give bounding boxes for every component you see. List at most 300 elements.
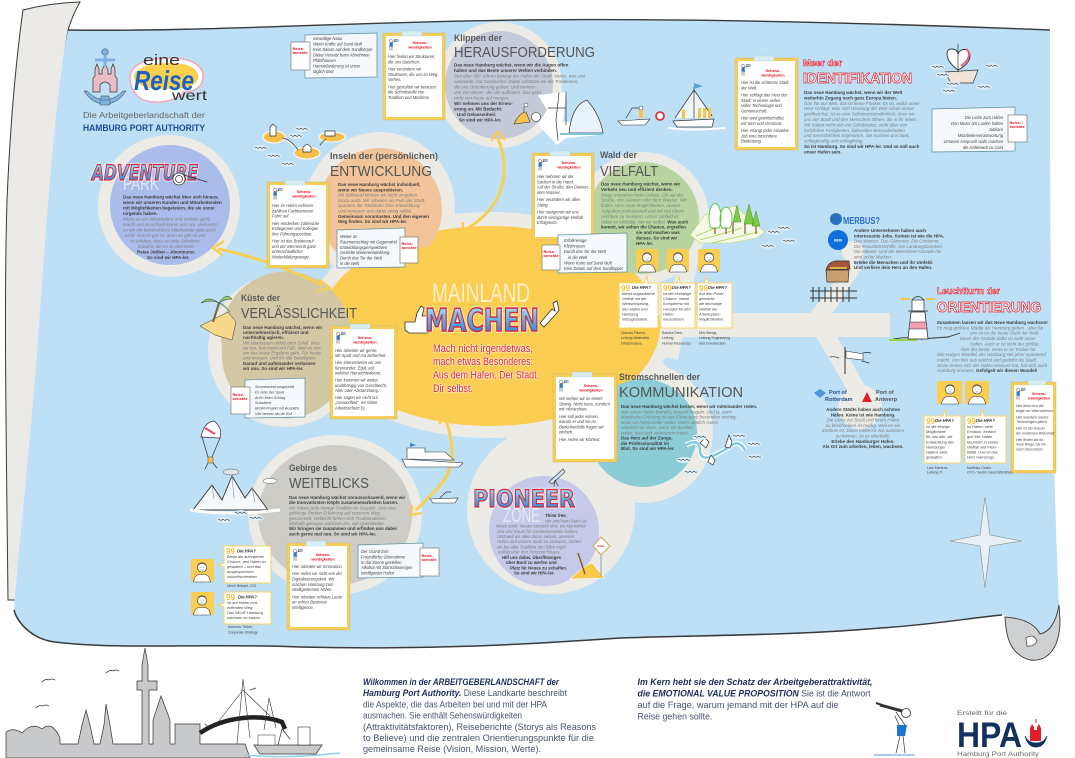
portraits: orientierung — [937, 381, 989, 404]
illustration: mountains — [190, 469, 280, 523]
text: entsteht nur dann, wenn wir darüber — [621, 425, 694, 430]
clipboard: identifikation: Job eine besondere — [740, 133, 778, 138]
text: merbus: interessante Jobs. Keinen ist wie die HPA. — [854, 233, 944, 238]
quote: matthias grabe: Herz Hamburgs. — [967, 455, 995, 460]
travel report: vielfalt: Kein Datum auf dem Sandkipper — [564, 266, 624, 271]
clipboard: orientierung: Hier ist der Kreisel — [1016, 427, 1045, 431]
clipboard: weitblicks: Hier reden wir nicht von der — [292, 571, 343, 576]
text: Zeit und Raum für Gedankenspiele haben. — [496, 529, 578, 534]
quote: lars mertens: für uns alle, die — [926, 434, 953, 439]
icon: lighthouse — [889, 296, 960, 340]
quote: claudia fischer: Hamburg — [622, 311, 639, 316]
slogan: Mach nicht irgendetwas, — [433, 343, 533, 355]
slogan: Aus dem Hafen. Der Stadt. — [433, 370, 539, 382]
quote: sandra dreh: Kompetenz mit — [663, 301, 690, 306]
text: andere staedte: zu können, ist es ebenfalls. — [835, 434, 890, 438]
quote: claudia fischer — [619, 276, 658, 345]
clipboard: verlaesslichkeit: unabhängig von Geschlecht, — [335, 383, 387, 388]
text: adventure: nicht. Das ist gut so, denn es gibt so viel — [125, 233, 206, 238]
text: adventure: macht uns so schnell keiner was vor. Und wenn — [123, 222, 218, 227]
text: core: auf die Frage, warum jemand mit der HPA auf die — [638, 700, 838, 711]
travel report: verlaesslichkeit: Auf'n fixen Schlag — [254, 396, 286, 400]
clipboard: verlaesslichkeit: Sehens- — [358, 336, 372, 340]
travel report: vielfalt — [542, 233, 627, 273]
panel: adventure park — [91, 161, 222, 260]
cream paths network — [98, 22, 890, 595]
quote: claudia fischer: Wertschöpfung, — [622, 301, 649, 306]
quote: dirk bereja — [697, 276, 732, 345]
icon: blue badge: MEIN — [834, 238, 843, 242]
clipboard: weitblicks: Hier arbeiten schlaue Leute — [292, 594, 343, 599]
illustration: tug boat — [430, 492, 458, 503]
quote: lars mertens: Entwicklung des — [926, 439, 954, 444]
quote: sandra dreh: einzusetzen. — [663, 316, 685, 322]
heading: Gebirge des — [289, 463, 337, 474]
travel report: herausforderung: Hamaufarderung ist unser — [313, 64, 361, 68]
travel report: verlaesslichkeit: Sonnenwind umgeprüft — [255, 385, 295, 389]
travel report: herausforderung: Reise- — [292, 46, 305, 51]
travel report: weitblicks: Alkohol mit Startschwierigen — [360, 565, 413, 570]
clipboard: herausforderung: stehen. — [388, 77, 401, 82]
quote: lars mertens: Ist die einzige — [926, 424, 951, 429]
text: welcome: gemeinsame Reise (Vision, Mission, Werte). — [363, 744, 541, 755]
quote: sandra dreh: Sandra Dreh, — [662, 331, 683, 335]
text: andere staedte: Erlebnis ist. Diese Liebe im Job ausleben — [822, 428, 905, 433]
clipboard: vielfalt: Hier verändern wir alles — [537, 197, 580, 202]
clipboard: vielfalt: würdigkeiten — [556, 166, 581, 170]
text: welcome — [363, 677, 596, 755]
panel: identifikation — [803, 58, 920, 154]
clipboard: verlaesslichkeit: „Gesundheit“, wir leben — [334, 400, 378, 405]
text: merbus: Die Kreuzfahrtschiffe. Die Landungsbrücken. — [854, 244, 943, 249]
text: adventure: zu erleben, dass es viele Schultern — [129, 238, 200, 244]
clipboard: vielfalt: dem Wasser. — [537, 190, 561, 195]
text: adventure: wenn wir unseren Kunden und Mitarbeitenden — [122, 200, 222, 205]
text: auch gerne mal neu. So sind wir HPA-ler. — [289, 531, 376, 536]
text: Gemeinsam vorantasten. Und den eigenen — [338, 214, 429, 219]
text: gesammelt. Vielleicht fühlen sich Traditionalisten — [289, 516, 386, 521]
text: wir bei aller Tradition den Blick regel- — [497, 544, 568, 549]
clipboard: weitblicks: Intelligence. — [292, 605, 314, 610]
text: die Professionalität im — [621, 441, 669, 446]
heading: WEITBLICKS — [289, 476, 369, 492]
text: Wozu auch. Neues entsteht dort, wo Menschen — [496, 524, 587, 529]
icon: blue badge — [828, 230, 848, 250]
text: Wir haben jede Menge Tradition im Gepäck. Und eine — [289, 505, 396, 510]
text: über Bord zu werfen und — [506, 560, 557, 565]
travel report: herausforderung: Gewaltige Natur — [313, 36, 343, 41]
clipboard: verlaesslichkeit: Alter oder Abstammung. — [334, 388, 379, 393]
quote: ulrich braeutel: 99 — [226, 547, 235, 556]
travel report: vielfalt: berichte — [544, 253, 559, 258]
clipboard: entwicklung: Kolleginnen und Kollegen — [272, 226, 319, 231]
text: Wer einen Hafen betreibt, braucht Regeln. Und ja, auch — [621, 409, 732, 414]
heading: Leuchtturm der — [937, 286, 1000, 297]
clipboard: herausforderung: Hier gestalten wir bewusst — [388, 84, 437, 89]
travel report: weitblicks — [358, 543, 439, 578]
text: Think free. — [545, 513, 567, 518]
clipboard: orientierung: lange vor Wind ablesen. — [1016, 409, 1054, 413]
text: Weg finden. So sind wir HPA-ler. — [338, 219, 407, 224]
quote: claudia fischer: Leitung Waterside — [621, 336, 649, 340]
travel report: entwicklung: Gezielte Weiterentwicklung — [340, 250, 390, 255]
text: merbus: Die Möwen. Und die Menschen! Gerade die — [854, 249, 942, 254]
icon: sand and sign: Start — [598, 544, 604, 548]
clipboard: entwicklung: Fahrt auf. — [272, 214, 290, 219]
clipboard: entwicklung: würdigkeiten — [291, 194, 316, 198]
clipboard: vielfalt: Erfolgreich. — [537, 220, 558, 225]
travel report: verlaesslichkeit: Reise- — [232, 392, 245, 397]
clipboard: entwicklung: und der Sternenritt ganz — [272, 244, 316, 249]
text: welcome: ausmachen. Sie enthält Sehenswürdigkeiten — [363, 711, 522, 722]
text: die Innovativsten Köpfe zusammenarbeiten lassen. — [289, 500, 398, 505]
quote: sandra dreh: Herzblut für den — [663, 306, 691, 311]
text: Darauf und aufeinander verlassen — [243, 361, 316, 366]
text: unternehmerisch, effizient und — [243, 330, 309, 335]
icon: islands — [254, 124, 345, 167]
text: core: Im Kern hebt sie den Schatz der Arbeitgeberattraktivität, — [638, 677, 872, 688]
text: So ist Hamburg. So sind wir HPA-ler. Und so soll auch — [804, 144, 920, 149]
travel report: weitblicks: Reise- — [422, 553, 434, 558]
quote: claudia fischer: den Hafen und — [622, 306, 648, 311]
logo: HPA: Erstellt für die — [957, 710, 1007, 717]
clipboard: orientierung: Hier lässt sich die — [1016, 404, 1043, 408]
heading: VERLÄSSLICHKEIT — [241, 305, 357, 322]
heading: ORIENTIERUNG — [937, 300, 1041, 316]
travel report: herausforderung: berichte — [292, 50, 308, 55]
travel report: entwicklung — [337, 228, 418, 268]
panel: herausforderung — [454, 33, 595, 122]
quote: matthias grabe: Emotion, einfach — [967, 429, 996, 434]
clipboard: weitblicks: intelligentesten Hafen. — [292, 587, 333, 592]
quote: claudia fischer: Bietet unglaubliche — [622, 291, 656, 296]
text: welcome: Hamburg Port Authority. Diese Landkarte beschreibt — [363, 688, 567, 699]
text: sie und machen was — [636, 230, 680, 235]
quote: dirk bereja: Leitung Engineering — [699, 336, 730, 340]
clipboard: entwicklung — [267, 180, 329, 268]
text: So sind wir HPA-ler. — [459, 118, 501, 122]
heading: IDENTIFIKATION — [803, 71, 912, 87]
text: Seit über 800 Jahren bewegt der Hafen die Stadt. Vieles, was uns — [454, 74, 586, 78]
quote: andreas thoene: wachsen zu lassen — [227, 615, 260, 620]
text: Wir bringen sie zusammen und erfinden uns dabei — [289, 526, 397, 531]
travel report: verlaesslichkeit: BIOM-Projekt mit Ausblick — [255, 407, 300, 411]
quote: claudia fischer: Die HPA? — [632, 285, 651, 290]
clipboard: kommunikation: mit Hierarchien. — [559, 407, 588, 412]
text: dabei so vielfältig, wie wir selbst. — [601, 219, 667, 224]
clipboard: herausforderung: die Schnittstelle von — [388, 90, 425, 95]
clipboard: kommunikation: würdigkeiten — [578, 388, 603, 392]
text: andere staedte: Als Ort zum arbeiten, leben, wachsen. — [822, 444, 904, 449]
text: andere staedte: zu beschreiben ist müßig. Weil es ein — [825, 423, 901, 428]
clipboard: entwicklung: ihre Führungsposition. — [272, 231, 313, 236]
clipboard: identifikation: Hier wird gewirtschaftet, — [741, 116, 785, 121]
travel report: identifikation: die Hafenwelt zu Gast — [963, 145, 1004, 150]
heading: zone: ZONE — [503, 505, 540, 527]
clipboard: orientierung: nach Übersetzen. — [1016, 448, 1043, 452]
quote: lars mertens: Hafens aktiv — [926, 450, 948, 454]
text: Was auch — [667, 219, 688, 224]
clipboard: kommunikation: Sehens- — [584, 384, 598, 388]
travel report: vielfalt: Erfolkreisige — [564, 238, 587, 243]
heading: HERAUSFORDERUNG — [454, 45, 595, 61]
panel: weitblicks — [289, 463, 406, 536]
clipboard: weitblicks — [287, 541, 350, 630]
heading: Meer der — [803, 58, 842, 69]
text: wir tun, hat Hand und Fuß. Weil es uns — [243, 345, 321, 350]
colored circles — [110, 31, 699, 586]
quote: andreas thoene: Das NEUE Hamburg — [227, 610, 264, 615]
quote: sandra dreh: Ist die einmalige — [663, 291, 692, 296]
text: um das beste Ergebnis geht. Für heute — [243, 350, 321, 356]
clipboard: kommunikation: einfach. — [559, 430, 573, 435]
text: Das Herz auf der Zunge, — [621, 436, 673, 440]
text: halten und das Beste unserer Welten verbinden. — [454, 68, 557, 73]
text: nachhaltig agieren. — [243, 335, 284, 340]
clipboard: verlaesslichkeit: welcher Hierarchieebene. — [335, 371, 381, 376]
heading: adventure: ADVENTURE — [91, 161, 198, 185]
clipboard: weitblicks: Hier arbeiten wir Innovation. — [292, 564, 343, 569]
arrow: mainland to weitblicks — [411, 416, 453, 515]
quote: claudia fischer: 99 — [621, 284, 630, 293]
text: den ewigen Wandel, der Hamburg seit jeher spannend — [937, 352, 1046, 357]
text: gehörige Portion Erfahrung auf unserem Weg — [289, 511, 380, 516]
text: Wozu auch. Wir arbeiten am Puls der Stadt, — [338, 198, 426, 203]
text: mäßig über den Horizont hinaus. — [498, 550, 560, 555]
text: andere staedte: Häfen. Keine ist wie Hamburg. — [831, 412, 895, 417]
text: merbus: Und verliere dein Herz an den Hafen. — [854, 265, 932, 270]
text: reichtum zu meistern. Unser Umfeld ist — [601, 214, 679, 219]
clipboard: entwicklung: zahllose Fachkarrieren — [271, 208, 314, 213]
clipboard: verlaesslichkeit: Hier sagen wir nicht nur — [335, 395, 379, 400]
text: Aufgaben professionell und mit viel Ideen- — [600, 208, 685, 214]
clipboard: weitblicks: Digitalisierungskeit. Wir — [292, 576, 335, 582]
icon: port logos: Port of — [876, 390, 894, 396]
clipboard: kommunikation — [553, 372, 617, 462]
text: geöffnet hat, ist es eine Selbstverständlichkeit, dass wir — [804, 112, 915, 117]
heading: Klippen der — [454, 33, 502, 44]
text: Wege entstehen beim Gehen. Ob auf der — [601, 192, 684, 197]
panel: vielfalt — [600, 150, 688, 246]
clipboard: verlaesslichkeit: Hier arbeiten wir gerne. — [335, 348, 378, 353]
heading: ENTWICKLUNG — [330, 164, 432, 180]
quote: sandra dreh: 99 — [663, 284, 672, 293]
text: weiterhin Zugang nach ganz Europa bieten. — [803, 95, 897, 100]
subtitle: HAMBURG PORT AUTHORITY — [83, 122, 206, 133]
clipboard: herausforderung: Tradition und Moderne. — [388, 95, 430, 100]
travel report: herausforderung: Kein Saturn auf dem Sandkörper — [313, 47, 373, 52]
clipboard: entwicklung: Weiterbildungswege. — [272, 254, 310, 260]
travel report: identifikation: Die Liebe zum Hafen — [965, 115, 1004, 120]
quote: sandra dreh: Chance, meine — [663, 296, 690, 301]
text: merbus: Erlebe die Menschen und ihr Umfeld. — [854, 260, 933, 265]
travel report: verlaesslichkeit: berichte — [232, 396, 248, 401]
text: Wir halten nicht viel von Schubladen, wohl aber von — [804, 122, 908, 127]
travel report: weitblicks: Intelligenter Hafen — [361, 571, 395, 576]
logo: eine Reise wert: Reise — [134, 65, 194, 96]
icon: man with telescope — [874, 703, 915, 755]
quote: lars mertens: Lars Mertens, — [927, 466, 948, 470]
icon: rope coil — [173, 173, 207, 185]
icon: port logos: Port of — [829, 390, 847, 396]
icon: port logos: Antwerp — [875, 397, 898, 403]
icon: wrench — [540, 301, 559, 327]
travel report: weitblicks: berichte — [422, 557, 437, 562]
text: Wir überlassen nichts dem Zufall. Was — [243, 340, 320, 345]
clipboard: kommunikation: Wir stehen wir im einem — [559, 396, 603, 401]
travel report: identifikation — [932, 107, 1027, 152]
quote: matthias grabe: gut! Der Hafen — [967, 434, 992, 439]
clipboard: verlaesslichkeit — [330, 324, 397, 419]
travel report: identifikation: Jubilare — [988, 127, 1004, 132]
text: fachlichen Fertigkeiten, kulturellen Besonderheiten — [804, 128, 905, 133]
mainland yellow area — [320, 226, 660, 426]
clipboard: kommunikation: Hier reden wir Klartext. — [559, 437, 601, 442]
text: uns von denen, die uns aufhalten. Das geht — [454, 90, 542, 95]
text: adventure: mit Möglichkeiten begeistern, die sie sonst — [123, 206, 215, 210]
clipboard: vielfalt: Stetig. — [537, 202, 549, 207]
text: Das neue Hamburg wächst individuell, — [338, 182, 420, 187]
clipboard: verlaesslichkeit: füreinander. Egal, auf — [335, 365, 375, 370]
slogan — [433, 343, 539, 395]
illustration: ferry — [402, 443, 463, 467]
text: Das neue Hamburg wächst, wenn wir der Welt — [804, 90, 903, 95]
portraits: weitblicks — [191, 559, 214, 615]
travel report: herausforderung: Wenn Kräfte auf Sand läuft — [313, 42, 363, 46]
text: core: Reise gehen sollte. — [638, 712, 712, 722]
text: die uns Orientierung geben. Und trennen — [454, 84, 536, 90]
quote: lars mertens: Möglichkeit — [926, 429, 946, 434]
heading: park: PARK — [123, 174, 159, 195]
text: ausmacht, hat Geschichte. Dabei schätzen wir die Traditionen, — [454, 79, 578, 84]
clipboard: weitblicks: würdigkeiten — [310, 558, 335, 562]
clipboard: herausforderung: würdigkeiten — [407, 46, 432, 50]
text: core — [638, 677, 872, 722]
text: adventure: Das neue Hamburg wächst über sich hinaus, — [123, 194, 219, 200]
clipboard: vielfalt: Auf der Straße, den Gleisen, — [536, 185, 589, 190]
quote: matthias grabe: bilität. Und ist das — [967, 450, 998, 454]
text: merbus: Andere Unternehmen haben auch — [854, 228, 926, 233]
text: Platz für Neues zu schaffen. — [510, 565, 567, 570]
arrow: adventure park to mainland — [213, 241, 330, 291]
travel report: entwicklung: berichte — [402, 245, 417, 250]
text: merbus: Das Wasser. Das Gleisnetz. Die Container. — [854, 239, 940, 244]
quote: dirk bereja: und Construction — [699, 341, 726, 345]
travel report: verlaesslichkeit — [231, 378, 305, 418]
illustration: climber and cliffs — [514, 92, 603, 145]
clipboard: identifikation — [735, 56, 798, 150]
clipboard: orientierung: neue Wege, bis hin — [1016, 443, 1046, 447]
clipboard: vielfalt: Hier navigieren wir uns — [537, 210, 579, 215]
clipboard: identifikation: Hier erlangt jeder einzelne — [741, 128, 790, 133]
quote: ulrich braeutel: Ulrich Bräutel, CIO — [227, 584, 256, 588]
clipboard: weitblicks: an echter Business — [292, 600, 327, 605]
icon: fence — [810, 287, 857, 302]
logo: eine Reise wert — [130, 52, 207, 103]
travel report: verlaesslichkeit: Subsitent — [255, 401, 272, 405]
quote: claudia fischer: mitzugestalten. — [622, 316, 648, 322]
travel report: entwicklung: Durch das Tor der Welt — [340, 256, 383, 261]
heading: Inseln der (persönlichen) — [330, 151, 438, 162]
travel report: herausforderung: Dieter Versatz beim Abnehmen — [313, 52, 370, 58]
clipboard: verlaesslichkeit: Arbeitsschutz (!). — [334, 405, 366, 410]
travel report: verlaesslichkeit: Es lebe der Sport — [255, 390, 285, 394]
text: Wir sind kein Start-Up. — [545, 518, 588, 523]
logo: eine Reise wert: eine — [143, 52, 180, 69]
clipboard: weitblicks: Sehens- — [316, 553, 330, 557]
text: Und weil wir alles daran setzen, unseren — [497, 534, 575, 539]
illustration: parachute — [201, 421, 221, 469]
arrow: klippen to mainland — [463, 132, 505, 232]
text: Verkehr neu und effizient denken. — [601, 187, 673, 192]
text: Zusammen lassen wir das Neue Hamburg wachsen! — [937, 320, 1048, 325]
quote: matthias grabe: CFO / Sechs Geschäftsführer — [967, 470, 1014, 474]
text: klassische Ordnung ist uns Eines ganz besonders wichtig: — [621, 414, 738, 420]
clipboard: verlaesslichkeit: Mit Spaß und mit Sicherheit. — [335, 353, 386, 358]
text: adventure: Wenn es um Infrastruktur und Verkehr geht, — [123, 216, 210, 222]
quote: matthias grabe: fasziniert in seiner — [967, 439, 999, 444]
logo: anchor crest — [84, 49, 126, 105]
quote: dirk bereja: gebracht: — [699, 296, 715, 301]
logo: machen: MACHEN — [425, 303, 539, 339]
text: Es mag größere Städte als Hamburg geben - aber für — [937, 325, 1044, 330]
quote: matthias grabe: Die HPA? — [976, 418, 995, 423]
clipboard: vielfalt: Sachen in die Hand. — [537, 179, 574, 184]
text: welcome: die Aspekte, die das Arbeiten bei und mit der HPA — [363, 699, 548, 710]
quote: matthias grabe — [965, 409, 1014, 474]
icon: compass rose — [950, 497, 1022, 588]
heading: MAINLAND — [432, 278, 530, 308]
text: Das neue Hamburg wächst, wenn wir — [243, 325, 323, 330]
text: adventure: nirgends haben. — [123, 211, 158, 216]
travel report: entwicklung: Reise- — [402, 241, 414, 246]
clipboard: orientierung: Sehens- — [1032, 392, 1046, 396]
text: unser Hafen sein. — [804, 149, 842, 154]
quote: sandra dreh: Hafen — [663, 311, 673, 316]
clipboard: orientierung: Hier wandern unsere — [1016, 415, 1049, 419]
quote: matthias grabe: 99 — [967, 417, 976, 426]
travel report: weitblicks: Der Grand Erin — [361, 549, 389, 554]
quote: lars mertens: gestalten. — [926, 455, 943, 460]
icon: telescope — [549, 469, 565, 486]
clipboard: kommunikation: Bedenkenfalls fragen wir — [559, 424, 604, 429]
travel report: identifikation: Mitarbeiterverantwortung — [958, 133, 1004, 138]
illustration: boat — [618, 106, 664, 125]
illustration: forest — [690, 204, 796, 249]
text: core: die EMOTIONAL VALUE PROPOSITION Sie ist die Antwort — [638, 688, 871, 700]
logo: HPA — [957, 710, 1047, 758]
quote: dirk bereja: 99 — [699, 284, 708, 293]
clipboard: identifikation: Bedeutung. — [741, 139, 762, 144]
text: adventure: So sind wir HPA-ler. — [147, 255, 189, 260]
clipboard: identifikation: würdigkeiten — [760, 74, 785, 78]
heading: KOMMUNIKATION — [619, 385, 743, 401]
travel report: vielfalt: Durch das Tor der Welt — [564, 249, 607, 254]
heading: Küste der — [241, 293, 280, 304]
text: welcome: Wilkommen in der ARBEITGEBERLANDSCHAFT der — [363, 677, 560, 688]
travel report: weitblicks: Freundliche Übernahme — [361, 554, 406, 559]
text: nicht von heute auf morgen. — [454, 96, 510, 100]
text: Straße, den Gleisen oder dem Wasser. Wir — [601, 198, 687, 203]
heading: Wald der — [600, 150, 637, 161]
text: und morgen. Und für alle Beteiligten. — [243, 356, 316, 361]
clipboard: entwicklung: Hier entdecken zahlreiche — [272, 221, 320, 226]
text: Das neue Hamburg wächst vorausschauend, wenn wir — [289, 495, 406, 500]
text: deshalb genauso wohl bei uns, wie Querdenker. — [289, 521, 385, 526]
clipboard: identifikation: Sehens- — [766, 69, 780, 73]
text: Hilf uns dabei, Überflüssiges — [502, 555, 562, 560]
clipboard: verlaesslichkeit: würdigkeiten — [352, 340, 377, 344]
